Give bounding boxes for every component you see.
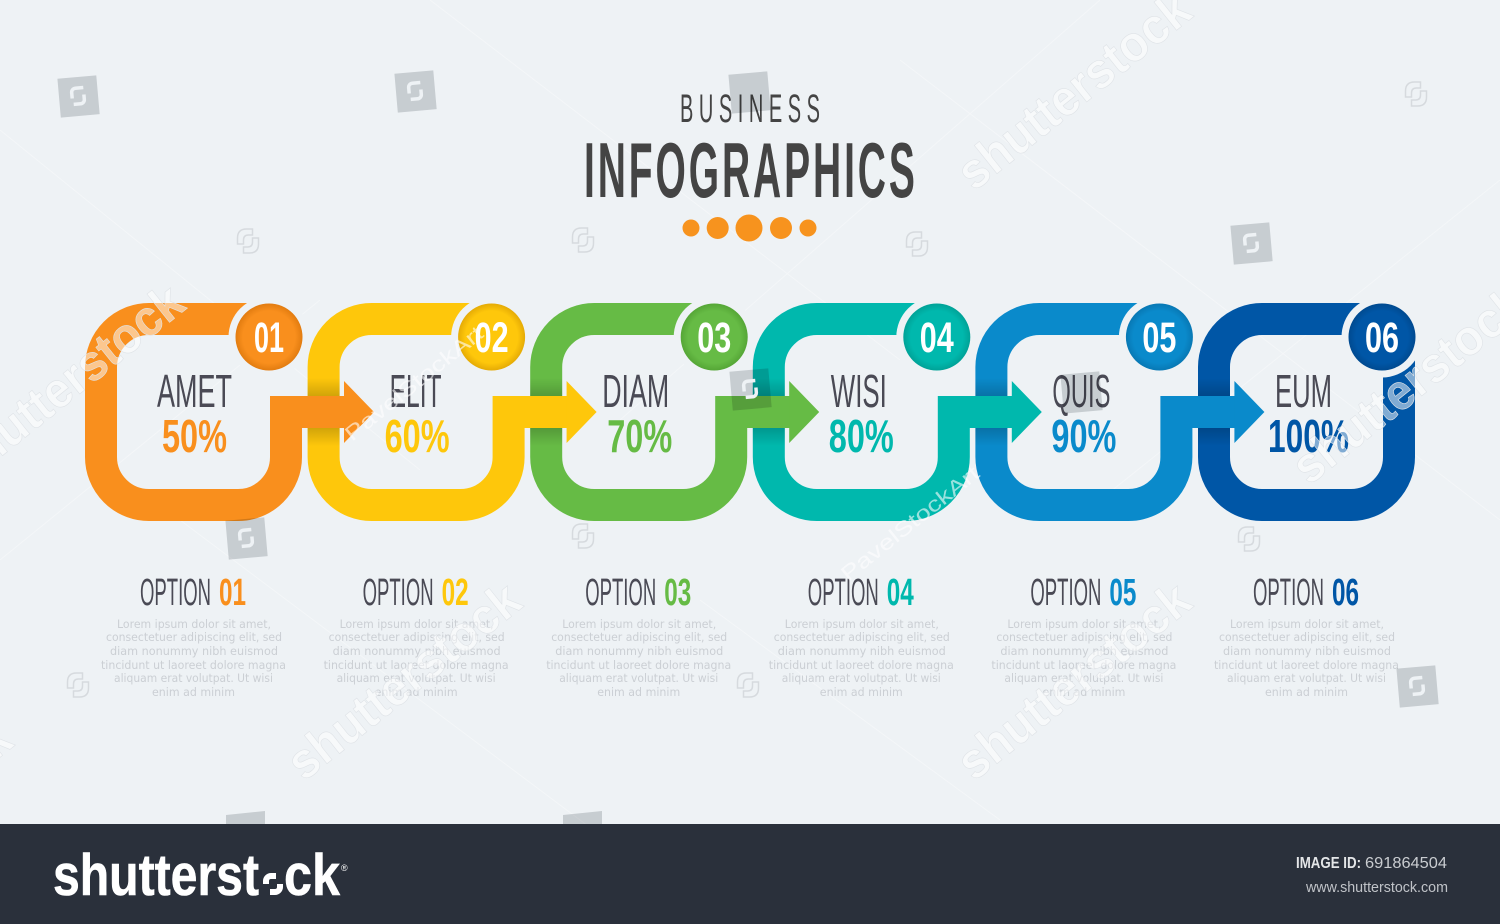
option 05 text block: consectetuer adipiscing elit, sed [996, 630, 1172, 644]
option 06 text block: diam nonummy nibh euismod [1223, 644, 1391, 658]
option 04 text block: aliquam erat volutpat. Ut wisi [782, 671, 941, 685]
footer logo: shutterstock: ck [284, 843, 341, 908]
option 02 text block: diam nonummy nibh euismod [333, 644, 501, 658]
option 06 text block: aliquam erat volutpat. Ut wisi [1227, 671, 1386, 685]
option 02 text block: consectetuer adipiscing elit, sed [329, 630, 505, 644]
option 05 text block: enim ad minim [1042, 685, 1125, 699]
option 03 text block: 03 [664, 572, 691, 614]
option 02 text block: tincidunt ut laoreet dolore magna [324, 658, 509, 672]
option 02 text block [324, 572, 509, 699]
option 03 text block: enim ad minim [597, 685, 680, 699]
option 03 text block [546, 572, 731, 699]
step 02 ring and arrow: ELIT: 60% [385, 410, 450, 462]
footer image id: 691864504 [1365, 855, 1447, 872]
watermark: shutterstock diagonal text: shutterstock [276, 571, 531, 791]
footer image id: IMAGE ID: [1296, 855, 1361, 872]
step 03 ring and arrow: DIAM [530, 296, 819, 505]
title line: business: BUSINESS [680, 85, 826, 131]
option 01 text block: OPTION [140, 572, 211, 614]
step 04 ring and arrow: WISI [753, 296, 1042, 505]
title line: infographics: INFOGRAPHICS [584, 127, 918, 215]
option 06 text block: Lorem ipsum dolor sit amet, [1230, 617, 1384, 631]
step 05 ring and arrow: QUIS: 05 [1142, 314, 1176, 362]
step 04 ring and arrow: WISI: 80% [829, 410, 894, 462]
watermark: author text: PavelStockArt [341, 322, 488, 446]
footer url: www.shutterstock.com [1305, 880, 1448, 896]
step 01 ring and arrow: AMET: 01 [254, 314, 284, 362]
watermark: author text: PavelStockArt [837, 462, 984, 586]
option 06 text block: tincidunt ut laoreet dolore magna [1214, 658, 1399, 672]
step 02 ring and arrow: ELIT: ELIT [390, 365, 442, 417]
option 05 text block [991, 572, 1176, 699]
option 04 text block: Lorem ipsum dolor sit amet, [785, 617, 939, 631]
option 05 text block: Lorem ipsum dolor sit amet, [1007, 617, 1161, 631]
watermark: outline icons [68, 82, 1426, 697]
step 05 ring and arrow: QUIS [975, 296, 1264, 505]
option 05 text block: aliquam erat volutpat. Ut wisi [1004, 671, 1163, 685]
footer logo: shutterstock: ® [341, 863, 348, 873]
step 04 ring and arrow: WISI: WISI [831, 365, 887, 417]
option 05 text block: OPTION [1030, 572, 1101, 614]
option 04 text block: enim ad minim [820, 685, 903, 699]
option 04 text block: OPTION [808, 572, 879, 614]
option 03 text block: Lorem ipsum dolor sit amet, [562, 617, 716, 631]
footer logo: shutterstock: shutterst [53, 843, 259, 908]
option 02 text block: enim ad minim [375, 685, 458, 699]
title dots [682, 214, 816, 242]
option 06 text block [1214, 572, 1399, 699]
step 03 ring and arrow: DIAM: DIAM [602, 365, 669, 417]
step 01 ring and arrow: AMET: AMET [157, 365, 232, 417]
step 05 ring and arrow: QUIS: QUIS [1052, 365, 1110, 417]
option 01 text block: Lorem ipsum dolor sit amet, [117, 617, 271, 631]
option 06 text block: 06 [1332, 572, 1359, 614]
step 06 ring: EUM: EUM [1275, 365, 1332, 417]
step 03 ring and arrow: DIAM: 70% [607, 410, 672, 462]
option 03 text block: aliquam erat volutpat. Ut wisi [559, 671, 718, 685]
option 01 text block [101, 572, 286, 699]
option 01 text block: tincidunt ut laoreet dolore magna [101, 658, 286, 672]
step 01 ring and arrow: AMET: 50% [162, 410, 227, 462]
watermark: shutterstock diagonal text: shutterstock [946, 571, 1201, 791]
step 04 ring and arrow: WISI: 04 [920, 314, 954, 362]
option 01 text block: 01 [219, 572, 246, 614]
step 06 ring: EUM [1198, 296, 1422, 505]
option 04 text block [769, 572, 954, 699]
option 03 text block: diam nonummy nibh euismod [555, 644, 723, 658]
step 03 ring and arrow: DIAM: 03 [697, 314, 731, 362]
option 01 text block: aliquam erat volutpat. Ut wisi [114, 671, 273, 685]
watermark: author text [341, 322, 984, 586]
option 01 text block: diam nonummy nibh euismod [110, 644, 278, 658]
option 05 text block: tincidunt ut laoreet dolore magna [991, 658, 1176, 672]
footer image id [1296, 855, 1447, 872]
option 02 text block: aliquam erat volutpat. Ut wisi [337, 671, 496, 685]
option 03 text block: OPTION [585, 572, 656, 614]
option 02 text block: Lorem ipsum dolor sit amet, [340, 617, 494, 631]
option 03 text block: consectetuer adipiscing elit, sed [551, 630, 727, 644]
step 01 ring and arrow: AMET [101, 296, 374, 505]
step 06 ring: EUM: 100% [1268, 410, 1349, 462]
footer bar [0, 824, 1500, 924]
option 02 text block: OPTION [363, 572, 434, 614]
option 04 text block: 04 [887, 572, 914, 614]
option 01 text block: enim ad minim [152, 685, 235, 699]
step 02 ring and arrow: ELIT: 02 [475, 314, 509, 362]
step 02 ring and arrow: ELIT [308, 296, 597, 505]
watermark: grey square icons [57, 70, 1439, 824]
step 05 ring and arrow: QUIS: 90% [1051, 410, 1116, 462]
option 01 text block: consectetuer adipiscing elit, sed [106, 630, 282, 644]
option 06 text block: enim ad minim [1265, 685, 1348, 699]
option 04 text block: tincidunt ut laoreet dolore magna [769, 658, 954, 672]
option 02 text block: 02 [442, 572, 469, 614]
option 06 text block: OPTION [1253, 572, 1324, 614]
option 06 text block: consectetuer adipiscing elit, sed [1219, 630, 1395, 644]
option 05 text block: 05 [1109, 572, 1136, 614]
option 04 text block: diam nonummy nibh euismod [778, 644, 946, 658]
option 04 text block: consectetuer adipiscing elit, sed [774, 630, 950, 644]
option 05 text block: diam nonummy nibh euismod [1000, 644, 1168, 658]
step 06 ring: EUM: 06 [1365, 314, 1399, 362]
option 03 text block: tincidunt ut laoreet dolore magna [546, 658, 731, 672]
